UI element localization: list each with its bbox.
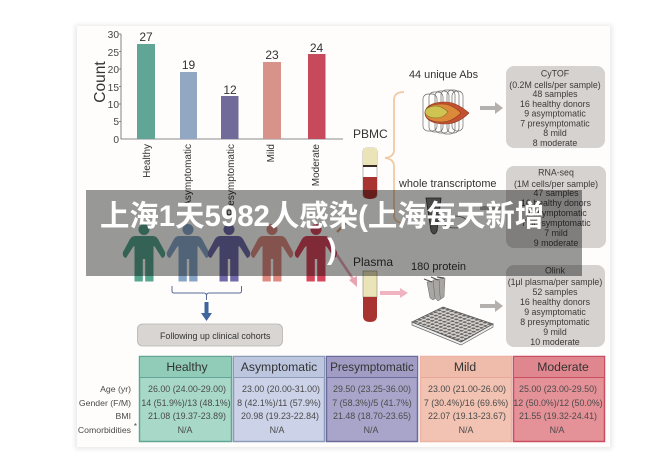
y axis ticks: 0 <box>113 135 119 146</box>
table column: Presymptomatic: Presymptomatic <box>330 361 414 374</box>
table column: Presymptomatic: N/A <box>364 425 378 435</box>
x axis labels: Mild <box>266 144 277 162</box>
person: presymptomatic <box>208 224 250 282</box>
icon: well plate <box>412 307 493 345</box>
box: Olink: (1μl plasma/per sample) <box>508 277 602 287</box>
box: CyTOF: 48 samples <box>532 89 578 99</box>
arrow: to Olink <box>480 300 503 312</box>
person: mild <box>251 224 293 282</box>
table row labels: Comorbidities <box>78 425 132 435</box>
box: RNA-seq: 47 samples <box>534 188 579 198</box>
table row labels <box>78 384 137 435</box>
tube: Plasma <box>363 271 377 322</box>
headline text: 上海1天5982人感染(上海每天新增 <box>100 200 544 233</box>
table column: Asymptomatic: 20.98 (19.23-22.84) <box>241 411 319 421</box>
label: whole transcriptome: whole transcriptome <box>398 178 496 190</box>
orange bracket <box>385 92 404 223</box>
x axis labels: Asymptomatic <box>183 144 194 207</box>
bar values <box>139 30 323 97</box>
bar values: 23 <box>265 48 279 62</box>
background card <box>77 26 610 447</box>
label: 44 unique Abs: 44 unique Abs <box>409 69 479 81</box>
table column: Moderate: 25.00 (23.00-29.50) <box>519 384 597 394</box>
table column: Mild: 22.07 (19.13-23.67) <box>428 411 506 421</box>
person: moderate <box>295 224 337 282</box>
arrow: to clinical cohorts <box>201 302 212 321</box>
table column: Healthy: 26.00 (24.00-29.00) <box>148 384 226 394</box>
y axis title: Count <box>92 61 109 103</box>
x axis labels: Healthy <box>142 144 153 178</box>
label: Plasma: Plasma <box>353 255 393 269</box>
box: RNA-seq: (1M cells/per sample) <box>514 179 598 189</box>
table column: Presymptomatic: 21.48 (18.70-23.65) <box>333 411 411 421</box>
table column: Presymptomatic: 7 (58.3%)/5 (41.7%) <box>332 398 412 408</box>
table column: Moderate: N/A <box>550 425 564 435</box>
box: RNA-seq: 16 healthy donors <box>521 198 592 208</box>
box: RNA-seq <box>506 166 606 248</box>
table column: Asymptomatic <box>234 356 324 442</box>
table column: Mild: 7 (30.4%)/16 (69.6%) <box>424 398 508 408</box>
table row labels: Age (yr) <box>100 384 131 394</box>
box: CyTOF <box>506 66 605 148</box>
table row labels: BMI <box>116 411 131 421</box>
table row labels: * <box>134 422 137 431</box>
box: Olink: 8 presymptomatic <box>520 317 590 327</box>
table column: Asymptomatic: Asymptomatic <box>241 360 317 374</box>
table column: Presymptomatic: 29.50 (23.25-36.00) <box>333 384 411 394</box>
icon: RNA tube and cell <box>426 198 467 234</box>
y axis ticks: 5 <box>113 117 119 128</box>
y axis ticks: 25 <box>108 48 119 59</box>
box: CyTOF: CyTOF <box>541 68 570 78</box>
box: CyTOF: 7 presymptomatic <box>520 118 590 128</box>
bracket under people <box>172 286 242 300</box>
table row labels: Gender (F/M) <box>79 398 131 408</box>
box: following up clinical cohorts: Following up clinical cohorts <box>160 331 271 341</box>
headline text: ) <box>327 233 337 266</box>
bar values: 19 <box>182 58 195 72</box>
bar values: 12 <box>223 83 237 97</box>
table column: Healthy: N/A <box>178 425 192 435</box>
table column: Healthy: Healthy <box>166 360 209 374</box>
box: Olink: Olink <box>545 266 566 276</box>
tube: PBMC <box>363 148 377 199</box>
box: following up clinical cohorts <box>138 324 282 346</box>
label: 180 protein: 180 protein <box>411 261 466 273</box>
arrow: to CyTOF <box>480 102 503 114</box>
table column: Healthy <box>140 356 232 442</box>
table column: Mild <box>420 356 512 442</box>
box: Olink <box>506 265 605 347</box>
box: RNA-seq: RNA-seq <box>538 168 574 178</box>
person: asymptomatic <box>167 224 209 282</box>
box: Olink: 16 healthy donors <box>520 297 591 307</box>
y axis ticks: 10 <box>108 100 119 111</box>
box: CyTOF: 8 mild <box>543 128 567 138</box>
box: RNA-seq: 9 asymptomatic <box>525 208 587 218</box>
box: Olink: 10 moderate <box>530 337 580 347</box>
bars <box>137 44 326 139</box>
x axis labels: Moderate <box>311 144 322 186</box>
table column: Healthy: 21.08 (19.37-23.89) <box>148 411 226 421</box>
box: Olink: 52 samples <box>532 287 578 297</box>
box: CyTOF: (0.2M cells/per sample) <box>509 80 601 90</box>
table column: Moderate: Moderate <box>537 360 589 374</box>
table column: Asymptomatic: 23.00 (20.00-31.00) <box>242 384 320 394</box>
box: CyTOF: 8 moderate <box>533 138 577 148</box>
table column: Moderate <box>513 356 604 442</box>
table column: Asymptomatic: 8 (42.1%)/11 (57.9%) <box>237 398 321 408</box>
box: Olink: 9 mild <box>543 327 567 337</box>
box: RNA-seq: 7 mild <box>544 228 568 238</box>
connector arrows from people to samples <box>337 222 357 287</box>
label: PBMC: PBMC <box>353 127 388 141</box>
table column: Asymptomatic: N/A <box>270 425 284 435</box>
person: healthy <box>123 224 165 282</box>
headline text <box>100 200 544 266</box>
banner: headline overlay <box>86 190 582 276</box>
box: RNA-seq: 9 moderate <box>534 238 578 248</box>
box: Olink: 9 asymptomatic <box>524 307 586 317</box>
bar values: 27 <box>139 30 153 44</box>
y axis ticks: 20 <box>108 65 119 76</box>
box: RNA-seq: 7 presymptomatic <box>521 218 591 228</box>
icon: flow cytometry layers <box>423 90 469 134</box>
table column: Mild: Mild <box>454 360 476 374</box>
x axis labels: Presymptomatic <box>226 144 237 216</box>
table column: Moderate: 21.55 (19.32-24.41) <box>519 411 597 421</box>
y axis ticks: 15 <box>108 83 119 94</box>
bar values: 24 <box>310 41 323 55</box>
arrow: to RNA-seq <box>480 202 503 214</box>
people: patient groups <box>123 224 337 282</box>
table column: Mild: 23.00 (21.00-26.00) <box>428 384 506 394</box>
icon: sample tubes <box>424 277 445 301</box>
table column: Moderate: 12 (50.0%)/12 (50.0%) <box>513 398 603 408</box>
table column: Healthy: 14 (51.9%)/13 (48.1%) <box>141 398 231 408</box>
bar chart: patient counts <box>92 30 343 216</box>
box: CyTOF: 16 healthy donors <box>520 99 591 109</box>
x axis labels <box>142 144 322 216</box>
table column: Mild: N/A <box>459 425 473 435</box>
box: CyTOF: 9 asymptomatic <box>524 108 586 118</box>
y axis ticks <box>108 30 119 146</box>
y axis ticks: 30 <box>108 30 119 41</box>
table column: Presymptomatic <box>326 356 418 442</box>
arrow: plasma to protein <box>380 288 408 298</box>
